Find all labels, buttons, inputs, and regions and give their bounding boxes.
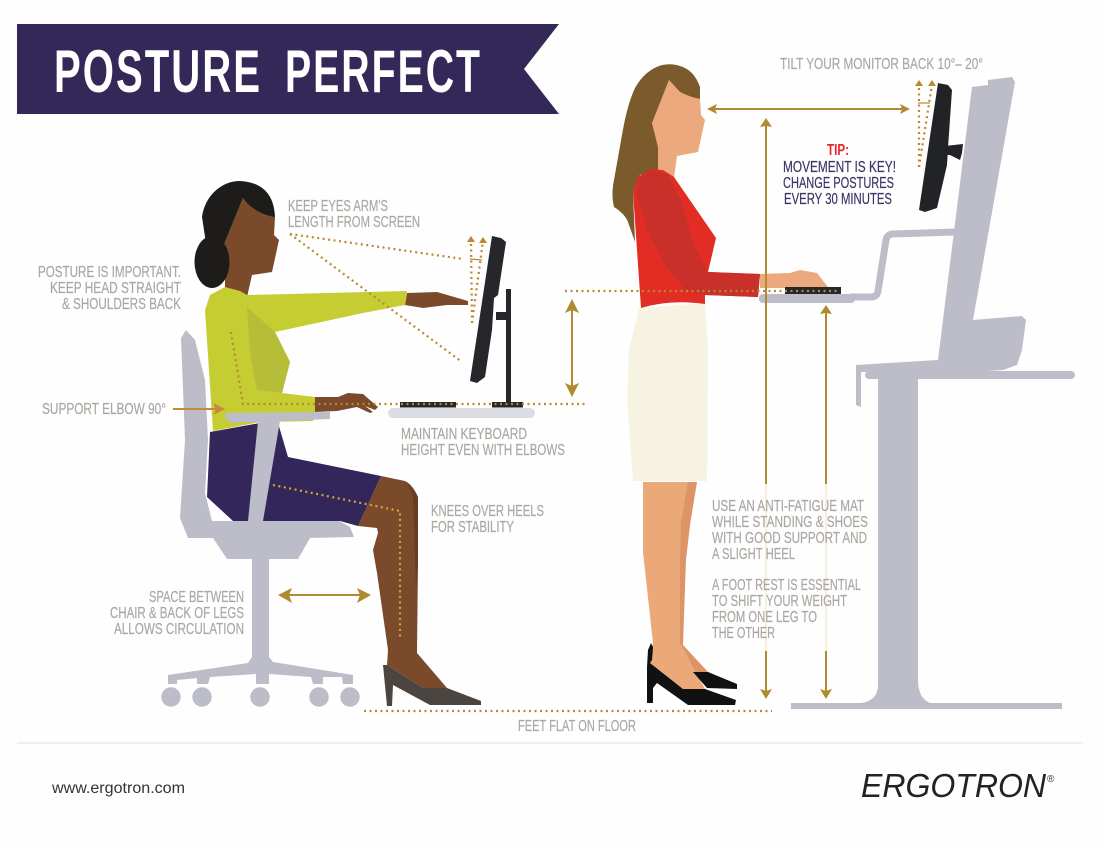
armrest and chair post bbox=[225, 412, 330, 521]
label: knees over heels: KNEES OVER HEELS bbox=[431, 503, 544, 520]
seated desk setup: monitor, stand and keyboard tray bbox=[388, 236, 535, 418]
label: keyboard height bbox=[401, 426, 565, 459]
label: posture is important: KEEP HEAD STRAIGHT bbox=[50, 280, 181, 297]
tilt angle ticks bbox=[470, 103, 930, 260]
title banner bbox=[17, 24, 559, 114]
logo: Ergotron: ERGOTRON bbox=[861, 767, 1046, 804]
label: foot rest: A FOOT REST IS ESSENTIAL bbox=[712, 577, 861, 594]
arrow: eye to monitor distance bbox=[707, 104, 910, 114]
seated office chair bbox=[161, 330, 360, 707]
label: keyboard height: MAINTAIN KEYBOARD bbox=[401, 426, 527, 443]
arrow: floor to keyboard height bbox=[820, 305, 832, 699]
standing desk workstation bbox=[759, 77, 1075, 709]
label: space between chair and legs bbox=[110, 589, 244, 638]
label: anti-fatigue mat: USE AN ANTI-FATIGUE MAT bbox=[712, 498, 864, 515]
label: posture is important bbox=[38, 264, 181, 313]
arrow: keyboard to eye height difference bbox=[565, 299, 579, 397]
title banner: PERFECT bbox=[285, 38, 482, 105]
label: foot rest: TO SHIFT YOUR WEIGHT bbox=[712, 593, 847, 610]
label: anti-fatigue mat: WHILE STANDING & SHOES bbox=[712, 514, 868, 531]
arrow: support elbow bbox=[173, 403, 225, 415]
label: foot rest: FROM ONE LEG TO bbox=[712, 609, 817, 626]
label: tilt your monitor: TILT YOUR MONITOR BACK 10°– 20° bbox=[780, 56, 983, 73]
label: foot rest: THE OTHER bbox=[712, 625, 775, 642]
label: keyboard height: HEIGHT EVEN WITH ELBOWS bbox=[401, 442, 565, 459]
tip callout: EVERY 30 MINUTES bbox=[784, 191, 892, 208]
label: knees over heels bbox=[431, 503, 544, 536]
tip callout: CHANGE POSTURES bbox=[783, 175, 894, 192]
label: space between chair and legs: ALLOWS CIRCULATION bbox=[114, 621, 244, 638]
label: anti-fatigue mat bbox=[712, 498, 868, 563]
label: keep eyes arm's length bbox=[288, 198, 420, 231]
label: knees over heels: FOR STABILITY bbox=[431, 519, 514, 536]
label: support elbow: SUPPORT ELBOW 90° bbox=[42, 401, 166, 418]
arrow: space between chair and legs bbox=[278, 588, 371, 603]
title banner: POSTURE bbox=[54, 38, 262, 105]
standing woman figure bbox=[612, 64, 841, 705]
logo: Ergotron: ® bbox=[1047, 774, 1055, 785]
label: keep eyes arm's length: KEEP EYES ARM'S bbox=[288, 198, 388, 215]
label: keep eyes arm's length: LENGTH FROM SCREEN bbox=[288, 214, 420, 231]
label: feet flat on floor: FEET FLAT ON FLOOR bbox=[518, 718, 636, 735]
tip callout bbox=[783, 142, 896, 208]
label: posture is important: POSTURE IS IMPORTANT. bbox=[38, 264, 181, 281]
label: anti-fatigue mat: WITH GOOD SUPPORT AND bbox=[712, 530, 867, 547]
dotted alignment guides bbox=[231, 85, 932, 711]
tip callout: TIP: bbox=[827, 142, 849, 159]
label: anti-fatigue mat: A SLIGHT HEEL bbox=[712, 546, 795, 563]
label: posture is important: & SHOULDERS BACK bbox=[62, 296, 181, 313]
tip callout: MOVEMENT IS KEY! bbox=[783, 159, 896, 176]
label: space between chair and legs: CHAIR & BACK OF LEGS bbox=[110, 605, 244, 622]
website url: www.ergotron.com bbox=[51, 780, 185, 797]
standing monitor bbox=[919, 83, 963, 212]
label: space between chair and legs: SPACE BETWEEN bbox=[149, 589, 244, 606]
label: foot rest bbox=[712, 577, 861, 642]
arrow: floor to eye height bbox=[760, 118, 772, 699]
tilt arrowheads bbox=[467, 80, 936, 243]
seated woman figure bbox=[194, 181, 481, 706]
